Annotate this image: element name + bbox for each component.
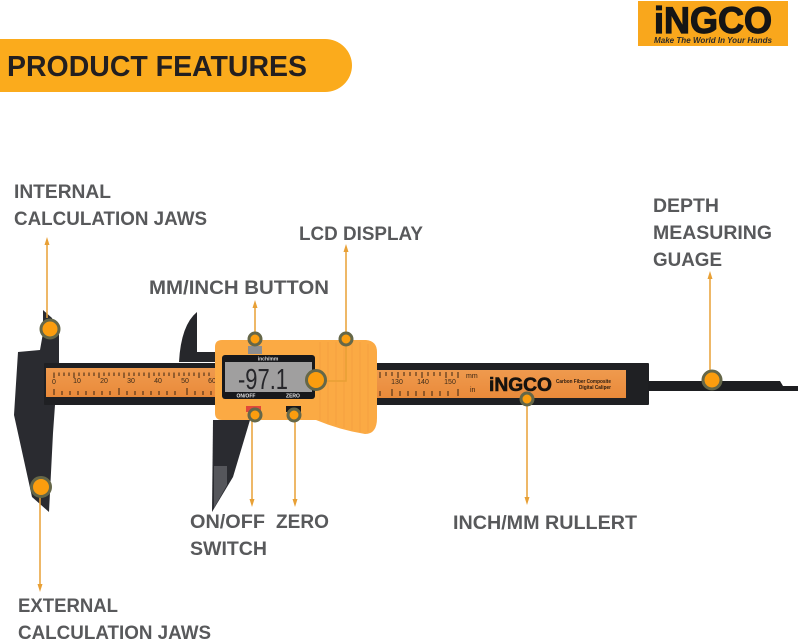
depth rod: [648, 381, 798, 391]
orange ruler strip right: 130: [391, 379, 403, 386]
mm/inch button: [248, 346, 262, 354]
slider grip ribs: [320, 342, 368, 432]
orange ruler strip left: 10: [73, 378, 81, 385]
slider body: [215, 340, 377, 434]
LCD display: inch/mm: [258, 356, 279, 362]
orange ruler strip left: 20: [100, 378, 108, 385]
orange ruler strip left: 40: [154, 378, 162, 385]
zero button: [286, 406, 301, 412]
callout: on/off switch: SWITCH: [190, 539, 267, 560]
LCD display: ON/OFF: [237, 394, 255, 400]
inside jaw on slider: [179, 312, 216, 362]
orange ruler strip right: Digital Caliper: [579, 385, 612, 391]
orange ruler strip left: [46, 368, 218, 397]
callout: internal calculation jaws: INTERNAL: [14, 182, 111, 203]
orange ruler strip right: [376, 370, 626, 398]
callout: depth measuring guage: [653, 196, 772, 389]
fixed jaw: [14, 310, 59, 512]
lower slider jaw: [212, 420, 250, 512]
orange ruler strip left: 0: [52, 379, 56, 386]
LCD display: ZERO: [286, 394, 300, 400]
callout: zero: ZERO: [276, 512, 329, 533]
callout: lcd display: [299, 224, 423, 390]
orange ruler strip right: 150: [444, 379, 456, 386]
logo: INGCO: iNGCO: [654, 0, 772, 41]
orange ruler strip left: 60: [208, 378, 216, 385]
orange ruler strip right: mm: [466, 373, 478, 380]
callout: internal calculation jaws: CALCULATION JAWS: [14, 209, 207, 230]
callout: external calculation jaws: EXTERNAL: [18, 596, 118, 617]
logo: INGCO: Make The World In Your Hands: [654, 35, 772, 45]
LCD display: -97.1: [238, 364, 288, 396]
callout: inch/mm rullert: INCH/MM RULLERT: [453, 513, 637, 534]
on/off button: [246, 406, 261, 412]
callout: depth measuring guage: DEPTH: [653, 196, 719, 217]
callout: internal calculation jaws: [14, 182, 207, 338]
callout: depth measuring guage: GUAGE: [653, 250, 722, 271]
orange ruler strip right: iNGCO: [489, 375, 552, 396]
orange ruler strip right: Carbon Fiber Composite: [556, 379, 611, 385]
callout: on/off switch: ON/OFF: [190, 512, 265, 533]
callout: mm/inch button: MM/INCH BUTTON: [149, 278, 329, 299]
orange ruler strip left: 50: [181, 378, 189, 385]
orange ruler strip left: 30: [127, 378, 135, 385]
callout: on/off switch: [190, 409, 267, 560]
callout: depth measuring guage: MEASURING: [653, 223, 772, 244]
LCD display: [222, 355, 315, 400]
main beam: [44, 363, 649, 405]
heading banner: product features: PRODUCT FEATURES: [7, 51, 307, 83]
callout: external calculation jaws: [18, 478, 211, 642]
callout: inch/mm rullert: [453, 393, 637, 534]
orange ruler strip right: 140: [417, 379, 429, 386]
callout: lcd display: LCD DISPLAY: [299, 224, 423, 245]
orange ruler strip right: in: [470, 387, 476, 394]
caliper illustration: [14, 310, 798, 512]
heading banner: product features: [0, 39, 352, 92]
callout: zero: [276, 409, 329, 533]
callout: mm/inch button: [149, 278, 329, 345]
